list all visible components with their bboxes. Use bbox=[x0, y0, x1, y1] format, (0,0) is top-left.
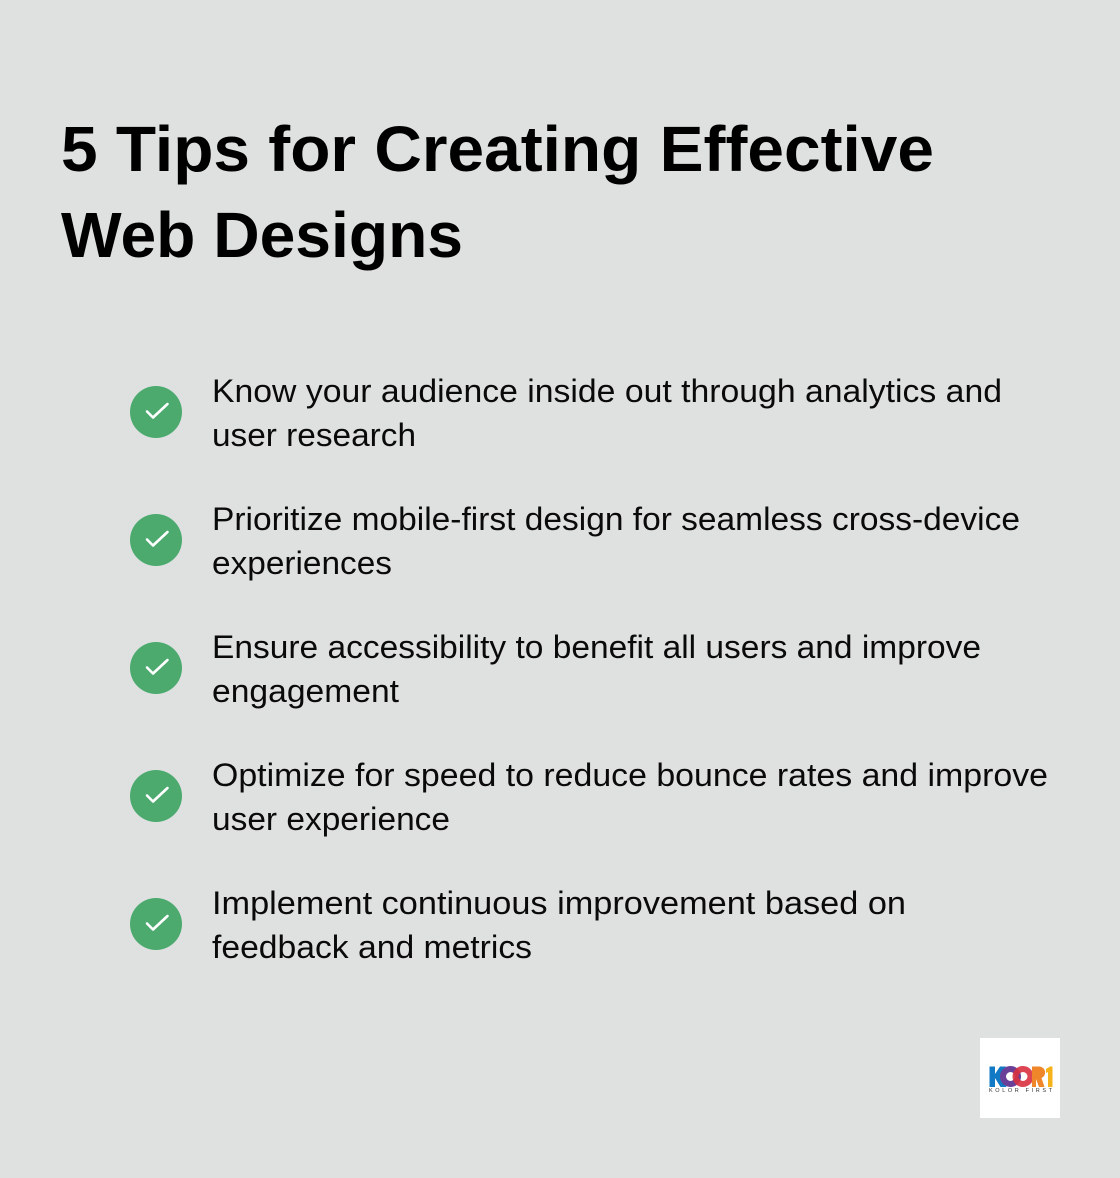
title bbox=[61, 113, 934, 271]
item 4 bbox=[130, 757, 1048, 837]
icon: check 1 bbox=[130, 386, 182, 438]
logo mark letters bbox=[990, 1066, 1052, 1087]
icon: check 3 bbox=[130, 642, 182, 694]
item 5 bbox=[130, 885, 906, 965]
text: item 2 bbox=[212, 501, 1020, 581]
text: item 1 bbox=[212, 373, 1002, 453]
icon: check 2 bbox=[130, 514, 182, 566]
item 2 bbox=[130, 501, 1020, 581]
logo tagline: KOLOR FIRST bbox=[989, 1088, 1053, 1094]
item 3 bbox=[130, 629, 981, 709]
text: item 2: experiences bbox=[212, 545, 392, 581]
icon: check 5 bbox=[130, 898, 182, 950]
checklist bbox=[130, 373, 1048, 965]
text: item 4 bbox=[212, 757, 1048, 837]
text: item 1: user research bbox=[212, 417, 416, 453]
text: item 3: Ensure accessibility to benefit all users and improve bbox=[212, 629, 981, 665]
text: item 5: feedback and metrics bbox=[212, 929, 532, 965]
text: item 4: user experience bbox=[212, 801, 450, 837]
item 1 bbox=[130, 373, 1002, 453]
icon: check 4 bbox=[130, 770, 182, 822]
text: item 1: Know your audience inside out through analytics and bbox=[212, 373, 1002, 409]
text: item 3 bbox=[212, 629, 981, 709]
logo: Koor1 Kolor First bbox=[980, 1038, 1060, 1118]
text: item 4: Optimize for speed to reduce bounce rates and improve bbox=[212, 757, 1048, 793]
text: item 3: engagement bbox=[212, 673, 399, 709]
text: item 5 bbox=[212, 885, 906, 965]
text: item 5: Implement continuous improvement based on bbox=[212, 885, 906, 921]
title: Web Designs bbox=[61, 199, 463, 271]
text: item 2: Prioritize mobile-first design for seamless cross-device bbox=[212, 501, 1020, 537]
title: 5 Tips for Creating Effective bbox=[61, 113, 934, 185]
